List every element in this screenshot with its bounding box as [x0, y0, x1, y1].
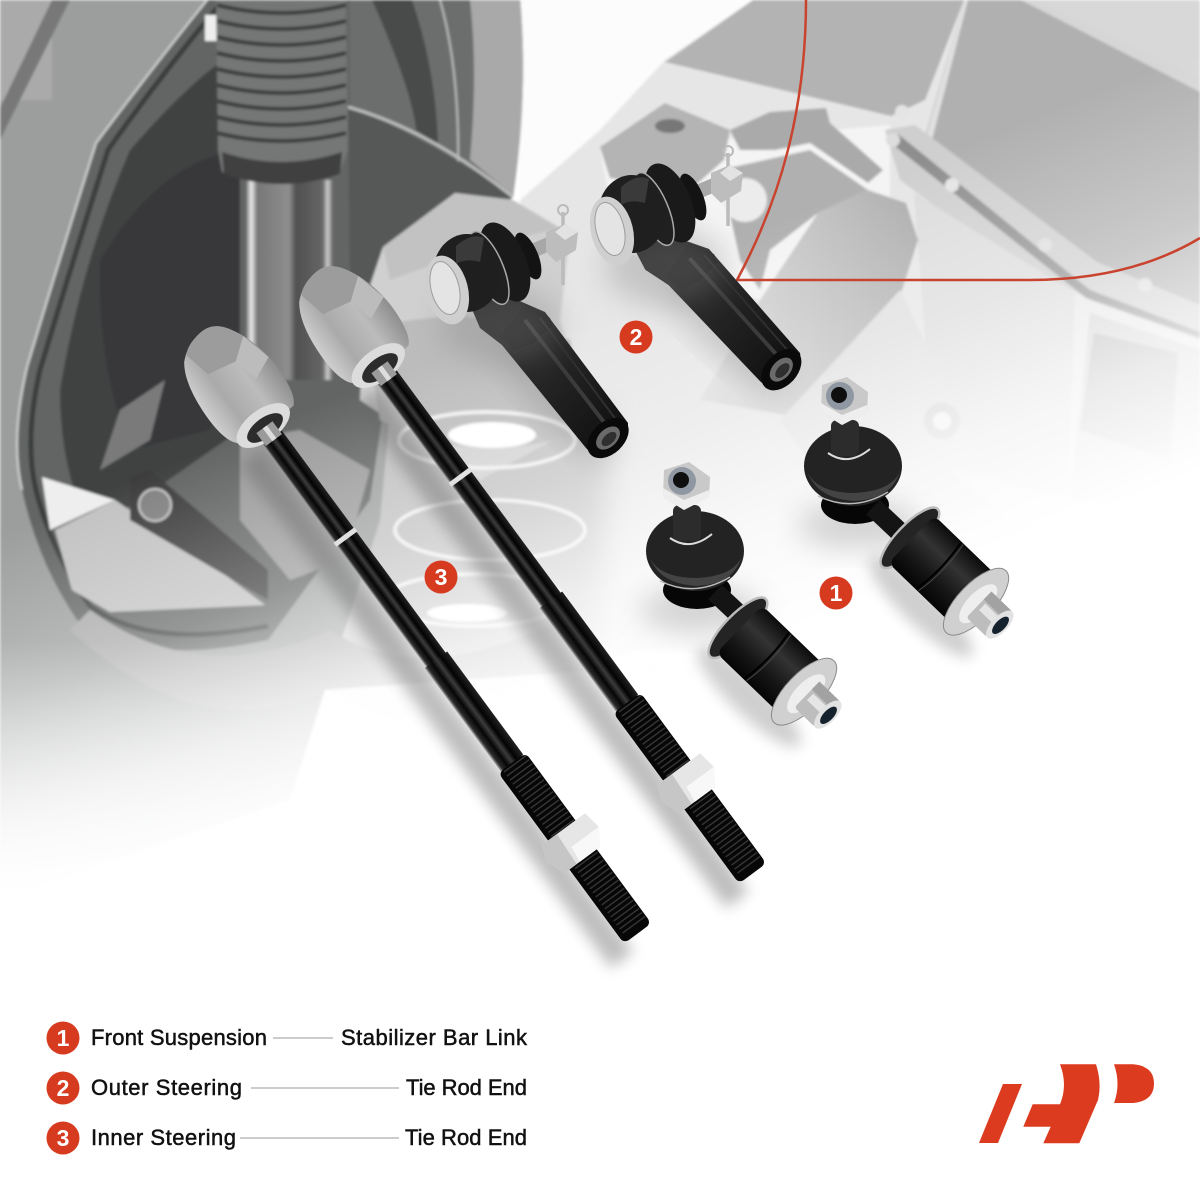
- legend row 3: [46, 1122, 527, 1154]
- legend row 3: 3: [57, 1125, 69, 1151]
- badge 3 on photo: 3: [435, 564, 447, 590]
- legend row 2: Outer Steering: [91, 1075, 242, 1100]
- legend row 2: [46, 1072, 527, 1104]
- badge 2 on photo: 2: [630, 324, 642, 350]
- legend row 2: Tie Rod End: [406, 1075, 527, 1100]
- legend row 3: Tie Rod End: [405, 1125, 527, 1150]
- legend: [46, 1022, 528, 1154]
- logo: A-P brand mark: [979, 1064, 1154, 1143]
- badge 1 on photo: [820, 576, 852, 610]
- left inner tie rod: [163, 308, 682, 968]
- engine bay panels: [340, 0, 1200, 720]
- right stabilizer bar link: [798, 377, 1035, 673]
- badge 2 on photo: [620, 320, 652, 354]
- left outer tie rod end: [418, 205, 636, 472]
- red outline curve: [737, 0, 1200, 280]
- legend row 1: 1: [57, 1025, 70, 1051]
- legend row 2: 2: [57, 1075, 69, 1101]
- legend row 1: Front Suspension: [91, 1025, 267, 1050]
- wheel, tire and strut: [0, 0, 780, 960]
- coil spring area: [340, 400, 610, 690]
- legend row 1: [46, 1022, 528, 1054]
- right outer tie rod end: [583, 146, 812, 414]
- legend row 1: Stabilizer Bar Link: [341, 1025, 528, 1050]
- badge 3 on photo: [424, 560, 458, 594]
- right inner tie rod: [278, 248, 797, 908]
- left stabilizer bar link: [640, 462, 863, 763]
- badge 1 on photo: 1: [830, 580, 843, 606]
- legend row 3: Inner Steering: [91, 1125, 236, 1150]
